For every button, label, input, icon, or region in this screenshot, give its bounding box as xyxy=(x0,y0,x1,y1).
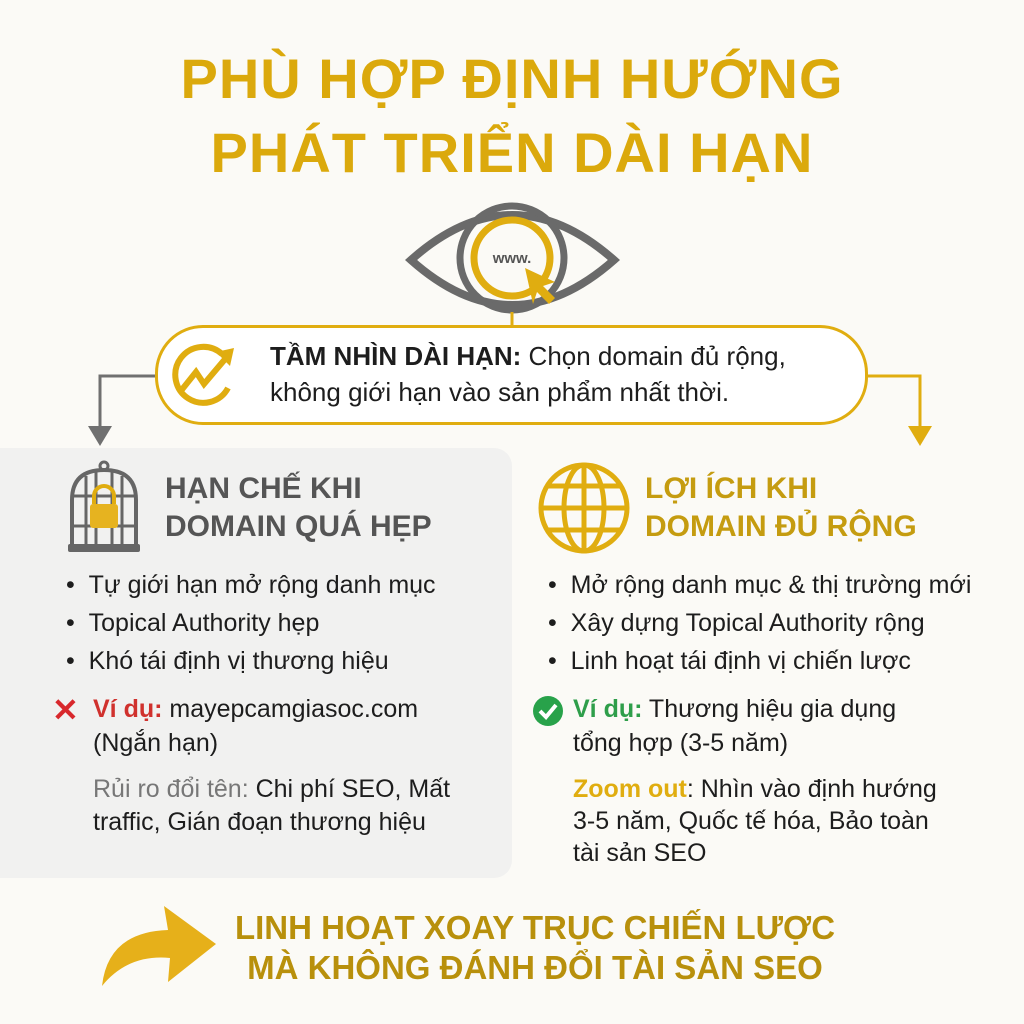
icon: curved arrow xyxy=(102,906,216,986)
list: limitations: • Khó tái định vị thương hiệu xyxy=(66,647,389,675)
title xyxy=(180,47,844,184)
panel: benefits xyxy=(533,462,971,867)
icon: eye with www xyxy=(405,202,620,325)
icon: eye with www: www. xyxy=(492,250,531,267)
icon: green check xyxy=(533,696,563,726)
list: benefits: • Xây dựng Topical Authority rộng xyxy=(548,609,925,637)
heading: benefits: LỢI ÍCH KHI xyxy=(645,472,817,505)
callout: long-term vision pill xyxy=(155,325,868,425)
heading: limitations xyxy=(165,472,432,543)
heading: limitations: HẠN CHẾ KHI xyxy=(165,472,362,505)
list: benefits: • Linh hoạt tái định vị chiến lược xyxy=(548,647,911,675)
bottom message: MÀ KHÔNG ĐÁNH ĐỔI TÀI SẢN SEO xyxy=(247,949,823,986)
arrows: branch left and right xyxy=(88,374,932,446)
text: zoom out: Zoom out: Nhìn vào định hướng xyxy=(573,775,937,803)
bottom message: LINH HOẠT XOAY TRỤC CHIẾN LƯỢC xyxy=(235,909,835,946)
text: rename risk: traffic, Gián đoạn thương hiệu xyxy=(93,808,426,836)
text: vision: TẦM NHÌN DÀI HẠN: Chọn domain đủ rộng, xyxy=(270,341,786,371)
text: good example xyxy=(573,695,896,757)
list: limitations xyxy=(66,571,436,675)
text: vision: không giới hạn vào sản phẩm nhất thời. xyxy=(270,377,729,407)
text: vision xyxy=(270,341,786,407)
text: bad example xyxy=(93,695,418,757)
icon: cage with lock xyxy=(68,460,140,552)
icon: red x: ✕ xyxy=(52,692,79,728)
text: good example: tổng hợp (3-5 năm) xyxy=(573,729,788,757)
bottom message xyxy=(235,909,835,986)
text: zoom out: tài sản SEO xyxy=(573,839,706,867)
title: PHÙ HỢP ĐỊNH HƯỚNG xyxy=(180,47,844,110)
list: limitations: • Topical Authority hẹp xyxy=(66,609,319,637)
title: PHÁT TRIỂN DÀI HẠN xyxy=(211,121,813,184)
list: benefits: • Mở rộng danh mục & thị trường mới xyxy=(548,571,971,599)
heading: benefits: DOMAIN ĐỦ RỘNG xyxy=(645,510,917,543)
text: bad example: (Ngắn hạn) xyxy=(93,729,218,757)
heading: benefits xyxy=(645,472,917,543)
text: rename risk xyxy=(93,775,450,836)
text: zoom out xyxy=(573,775,937,867)
text: good example: Ví dụ: Thương hiệu gia dụng xyxy=(573,695,896,723)
text: bad example: Ví dụ: mayepcamgiasoc.com xyxy=(93,695,418,723)
list: limitations: • Tự giới hạn mở rộng danh mục xyxy=(66,571,436,599)
list: benefits xyxy=(548,571,971,675)
text: zoom out: 3-5 năm, Quốc tế hóa, Bảo toàn xyxy=(573,807,929,835)
icon: growth arrow xyxy=(172,344,234,406)
heading: limitations: DOMAIN QUÁ HẸP xyxy=(165,510,432,543)
panel: limitations xyxy=(0,448,512,878)
text: rename risk: Rủi ro đổi tên: Chi phí SEO, Mất xyxy=(93,775,450,803)
icon: globe xyxy=(538,462,630,554)
